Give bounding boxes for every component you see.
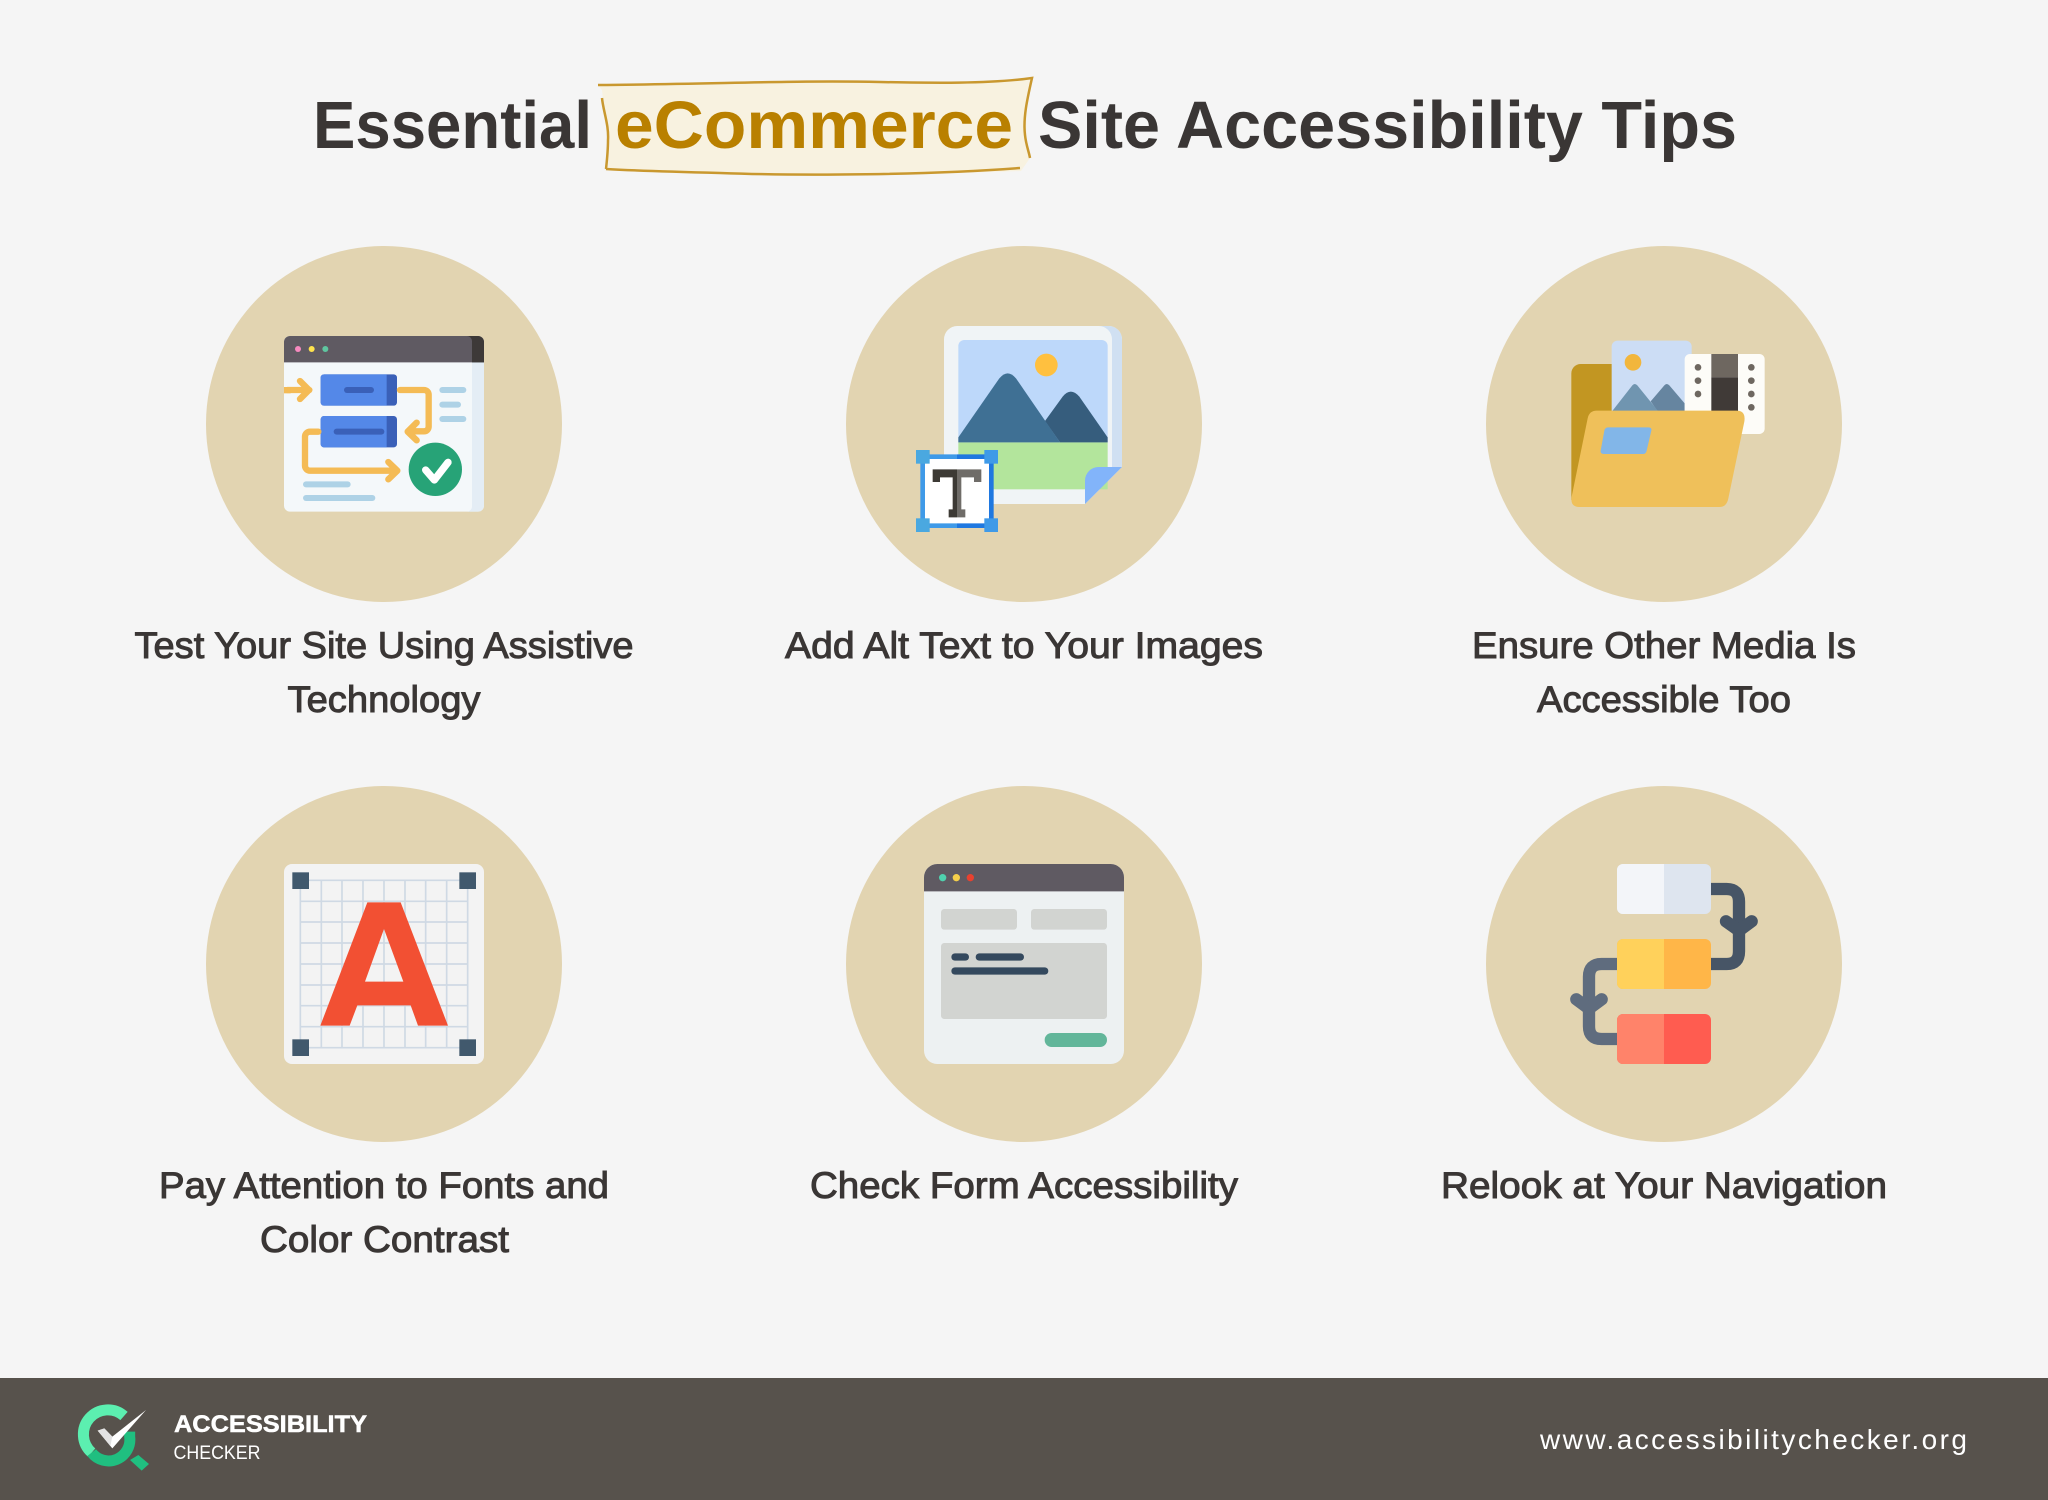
logo text [174,1411,367,1464]
panel: other media [1472,246,1856,720]
title [313,78,1737,175]
logo text: ACCESSIBILITY [174,1411,367,1438]
label: Accessible Too [1537,678,1791,720]
icon: letter A on grid [284,864,484,1064]
label: Ensure Other Media Is [1472,624,1856,666]
label [134,624,634,720]
panel: navigation [1441,786,1887,1206]
icon: image with text box [916,326,1122,532]
icon: web form [924,864,1124,1064]
panel: form accessibility [810,786,1238,1206]
panel: alt text [785,246,1263,666]
title: Essential [313,88,592,163]
title highlighted word: eCommerce [615,88,1013,163]
label: Pay Attention to Fonts and [159,1164,609,1206]
label: Test Your Site Using Assistive [134,624,634,666]
icon: navigation flow [1576,864,1752,1064]
circle background [1486,786,1842,1142]
circle background [206,786,562,1142]
circle background [206,246,562,602]
title highlight box [598,78,1032,175]
logo text: CHECKER [174,1443,260,1464]
circle background [1486,246,1842,602]
icon: logo magnifier check [83,1410,149,1471]
title: Site Accessibility Tips [1038,88,1737,163]
website url: www.accessibilitychecker.org [1539,1424,1967,1455]
label: Technology [288,678,481,720]
panel: test with assistive technology [134,246,634,720]
label: Check Form Accessibility [810,1164,1238,1206]
circle background [846,246,1202,602]
panel: fonts and contrast [159,786,609,1260]
label: Relook at Your Navigation [1441,1164,1887,1206]
circle background [846,786,1202,1142]
label [159,1164,609,1260]
label [1472,624,1856,720]
footer [0,1378,2048,1500]
icon: browser flowchart [284,336,484,512]
label: Add Alt Text to Your Images [785,624,1263,666]
label: Color Contrast [260,1218,510,1260]
icon: folder with media [1571,341,1765,507]
